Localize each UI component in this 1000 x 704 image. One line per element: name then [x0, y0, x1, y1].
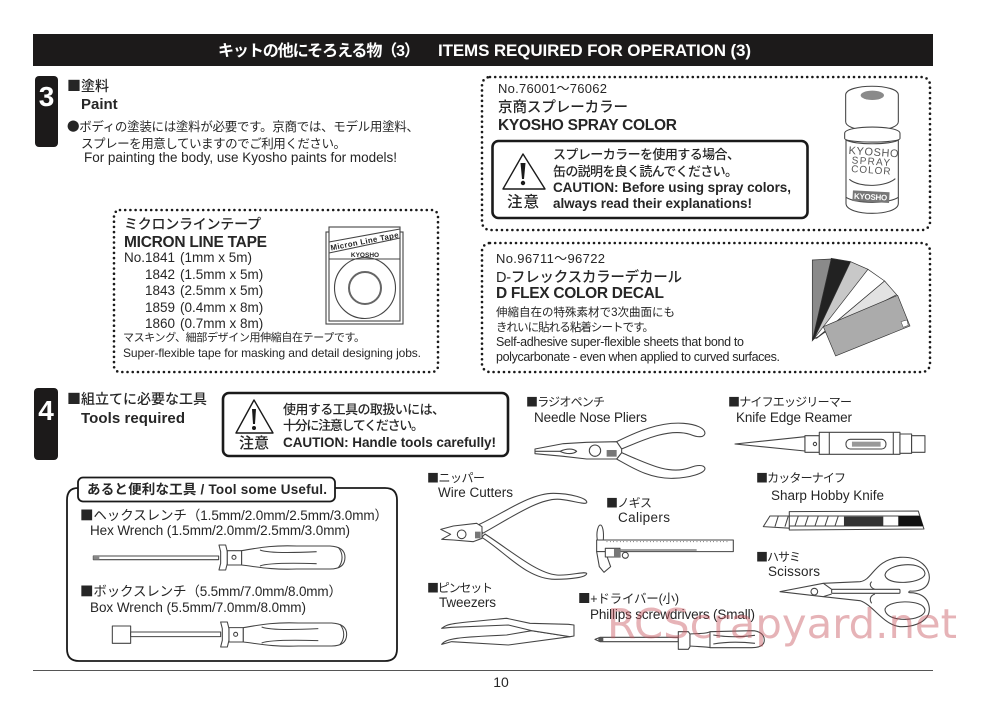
section 3 badge: 3: [39, 81, 54, 112]
calipers label: Calipers: [618, 510, 670, 525]
micron tape product list: (1.5mm x 5m): [180, 267, 263, 282]
decal description: [496, 305, 780, 364]
icon: tape package: KYOSHO: [351, 252, 379, 259]
section 4 badge: 4: [38, 395, 54, 426]
hex wrench label: Hex Wrench (1.5mm/2.0mm/2.5mm/3.0mm): [90, 523, 350, 538]
phillips screwdriver label: Phillips screwdrivers (Small): [590, 607, 755, 622]
useful tools label: あると便利な工具 / Tool some Useful.: [87, 482, 327, 497]
micron tape product list: No.1841: [124, 250, 175, 265]
icon: tweezers: [442, 618, 574, 645]
sharp hobby knife label: ■カッターナイフ: [756, 469, 846, 486]
spray color title: [498, 81, 677, 134]
micron tape title: MICRON LINE TAPE: [124, 234, 267, 251]
caution text: CAUTION: Handle tools carefully!: [283, 435, 496, 450]
knife edge reamer label: ■ナイフエッジリーマー: [728, 393, 852, 410]
caution box: tools: 注意: [239, 435, 269, 452]
caution text: 缶の説明を良く読んでください。: [553, 164, 738, 179]
caution text: 使用する工具の取扱いには、: [283, 402, 445, 417]
icon: spray can: COLOR: [851, 164, 891, 178]
box wrench label: Box Wrench (5.5mm/7.0mm/8.0mm): [90, 600, 306, 615]
spray color title: No.76001～76062: [498, 81, 607, 96]
calipers label: ■ノギス: [606, 494, 652, 511]
micron tape product list: (1mm x 5m): [180, 250, 252, 265]
paint description: For painting the body, use Kyosho paints for models!: [84, 150, 397, 165]
wire cutters label: Wire Cutters: [438, 485, 513, 500]
watermark: RCScrapyard.net: [607, 600, 957, 648]
decal description: 伸縮自在の特殊素材で3次曲面にも: [496, 305, 675, 319]
tweezers label: [427, 579, 496, 610]
micron tape description: マスキング、細部デザイン用伸縮自在テープです。: [123, 330, 365, 344]
decal description: Self-adhesive super-flexible sheets that bond to: [496, 335, 744, 349]
micron tape title: ミクロンラインテープ: [124, 216, 261, 232]
knife edge reamer label: Knife Edge Reamer: [736, 410, 852, 425]
section 4 heading: [67, 389, 207, 427]
needle nose pliers label: Needle Nose Pliers: [534, 410, 647, 425]
sharp hobby knife label: [756, 469, 884, 503]
micron tape product list: 1842: [145, 267, 175, 282]
section 4 badge: [34, 388, 58, 460]
hex wrench label: ■ヘックスレンチ（1.5mm/2.0mm/2.5mm/3.0mm）: [80, 504, 388, 524]
panel: d flex color decal: [482, 243, 930, 372]
tweezers label: Tweezers: [439, 595, 496, 610]
icon: decal color swatches: [812, 258, 910, 356]
decal title: D FLEX COLOR DECAL: [496, 285, 664, 302]
panel: micron line tape: [114, 210, 438, 372]
icon: warning triangle: [236, 400, 273, 433]
section 3 heading: ■塗料: [67, 76, 109, 96]
header bar: ITEMS REQUIRED FOR OPERATION (3): [438, 41, 751, 60]
icon: spray can: KYOSHO: [854, 192, 888, 203]
caution text: CAUTION: Before using spray colors,: [553, 180, 791, 195]
section 4 heading: Tools required: [81, 410, 185, 427]
caution text: [553, 147, 791, 211]
hex wrench label: [80, 504, 388, 538]
icon: hex wrench: [93, 545, 345, 570]
header bar: [33, 34, 933, 66]
micron tape description: [123, 330, 421, 360]
box wrench label: [80, 580, 342, 615]
icon: tape package: Micron Line Tape: [330, 230, 400, 252]
icon: needle nose pliers: [535, 423, 705, 478]
box wrench label: ■ボックスレンチ（5.5mm/7.0mm/8.0mm）: [80, 580, 342, 600]
panel: kyosho spray color: [482, 77, 930, 230]
sharp hobby knife label: Sharp Hobby Knife: [771, 488, 884, 503]
decal title: [496, 251, 682, 302]
spray color title: 京商スプレーカラー: [498, 99, 628, 116]
icon: box wrench: [112, 622, 347, 647]
footer rule: [33, 670, 933, 671]
caution box: tools: [223, 393, 508, 456]
icon: scissors: [780, 557, 929, 627]
needle nose pliers label: ■ラジオペンチ: [526, 393, 605, 410]
caution text: スプレーカラーを使用する場合、: [553, 147, 740, 162]
micron tape product list: (2.5mm x 5m): [180, 283, 263, 298]
caution text: [283, 402, 496, 450]
calipers label: [606, 494, 670, 525]
panel: useful tools: [67, 478, 397, 661]
icon: warning triangle: [503, 154, 545, 189]
header bar: キットの他にそろえる物（3）: [218, 42, 420, 60]
scissors label: Scissors: [768, 564, 820, 579]
scissors label: [756, 548, 820, 579]
tweezers label: ■ピンセット: [427, 579, 493, 596]
micron tape product list: [124, 250, 263, 331]
decal description: polycarbonate - even when applied to curved surfaces.: [496, 350, 780, 364]
page number: 10: [493, 674, 509, 690]
decal title: D-フレックスカラーデカール: [496, 268, 682, 286]
icon: sharp hobby knife: [763, 511, 924, 530]
section 3 heading: [67, 76, 118, 113]
section 4 heading: ■組立てに必要な工具: [67, 389, 207, 409]
icon: spray can: [845, 86, 900, 213]
icon: phillips screwdriver: [595, 631, 764, 649]
needle nose pliers label: [526, 393, 647, 425]
wire cutters label: [427, 469, 513, 500]
wire cutters label: ■ニッパー: [427, 469, 485, 486]
icon: calipers: [597, 525, 733, 572]
phillips screwdriver label: ■+ドライバー(小): [578, 588, 679, 607]
decal description: きれいに貼れる粘着シートです。: [496, 320, 654, 334]
micron tape product list: 1859: [145, 300, 175, 315]
icon: knife edge reamer: [735, 432, 925, 454]
micron tape title: [124, 216, 267, 251]
micron tape product list: 1860: [145, 316, 175, 331]
caution box: spray: [492, 141, 808, 218]
decal title: No.96711～96722: [496, 251, 605, 266]
section 3 badge: [35, 76, 58, 147]
paint description: ●ボディの塗装には塗料が必要です。京商では、モデル用塗料、: [67, 116, 419, 135]
section 3 heading: Paint: [81, 96, 118, 113]
icon: wire cutters: [441, 493, 587, 579]
icon: spray can: SPRAY: [851, 155, 891, 169]
scissors label: ■ハサミ: [756, 548, 801, 565]
icon: spray can: KYOSHO: [848, 145, 899, 160]
micron tape product list: 1843: [145, 283, 175, 298]
caution text: always read their explanations!: [553, 196, 752, 211]
paint description: スプレーを用意していますのでご利用ください。: [81, 136, 346, 151]
useful tools label: [78, 478, 335, 502]
paint description: [67, 116, 419, 165]
micron tape description: Super-flexible tape for masking and detail designing jobs.: [123, 346, 421, 360]
icon: tape package: [326, 227, 403, 324]
knife edge reamer label: [728, 393, 852, 425]
caution box: spray: 注意: [507, 193, 539, 211]
spray color title: KYOSHO SPRAY COLOR: [498, 117, 677, 134]
phillips screwdriver label: [578, 588, 755, 622]
micron tape product list: (0.4mm x 8m): [180, 300, 263, 315]
micron tape product list: (0.7mm x 8m): [180, 316, 263, 331]
caution text: 十分に注意してください。: [283, 418, 424, 433]
